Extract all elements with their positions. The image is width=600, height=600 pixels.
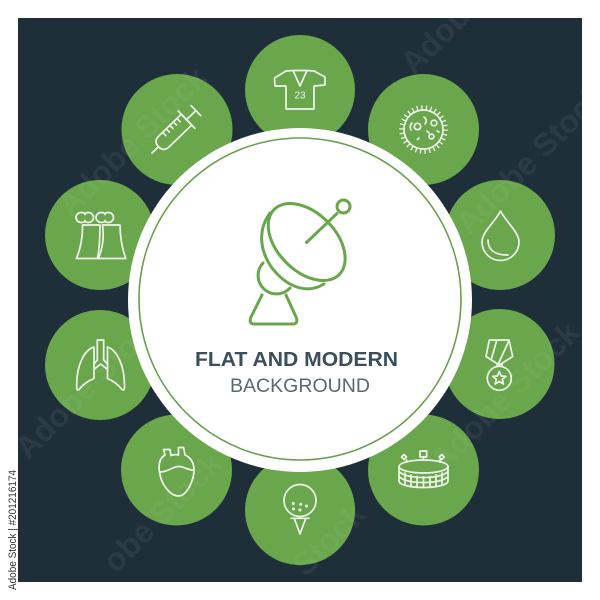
watermark: Adobe Stock <box>7 302 171 466</box>
title: FLAT AND MODERN <box>195 348 398 371</box>
watermark: Adobe Stock <box>50 59 214 223</box>
green ring <box>139 138 461 460</box>
icon: golf ball on tee <box>284 484 316 534</box>
subtitle: BACKGROUND <box>230 375 370 397</box>
icon: water drop <box>482 211 519 260</box>
icon: heart <box>159 448 194 496</box>
icon: cooling towers <box>76 212 126 258</box>
green circle: golf ball <box>245 455 355 565</box>
green circle: virus <box>368 74 479 185</box>
green circle: medal <box>444 309 554 419</box>
green circle: heart <box>121 414 232 526</box>
watermark: obe Stock <box>95 445 229 579</box>
green circle: syringe <box>122 74 232 185</box>
watermark: Adobe Stock <box>422 314 586 478</box>
side credit text: Adobe Stock | #201216174 <box>7 470 19 590</box>
icon: shirt <box>274 70 325 109</box>
central white circle <box>128 128 472 472</box>
icon: stadium <box>399 451 448 488</box>
icon: satellite dish <box>250 189 360 324</box>
green circle: stadium <box>368 414 479 526</box>
green circle: drop <box>445 180 555 290</box>
watermark: Stock <box>285 496 373 583</box>
icon: medal <box>486 340 513 390</box>
green circle: lungs <box>45 310 155 420</box>
icon: virus <box>402 108 446 152</box>
icon: syringe <box>144 102 204 162</box>
green circle: cooling towers <box>45 180 155 290</box>
icon: shirt: 23 <box>294 90 306 102</box>
green circle: shirt <box>245 35 355 145</box>
icon: lungs <box>77 340 125 390</box>
